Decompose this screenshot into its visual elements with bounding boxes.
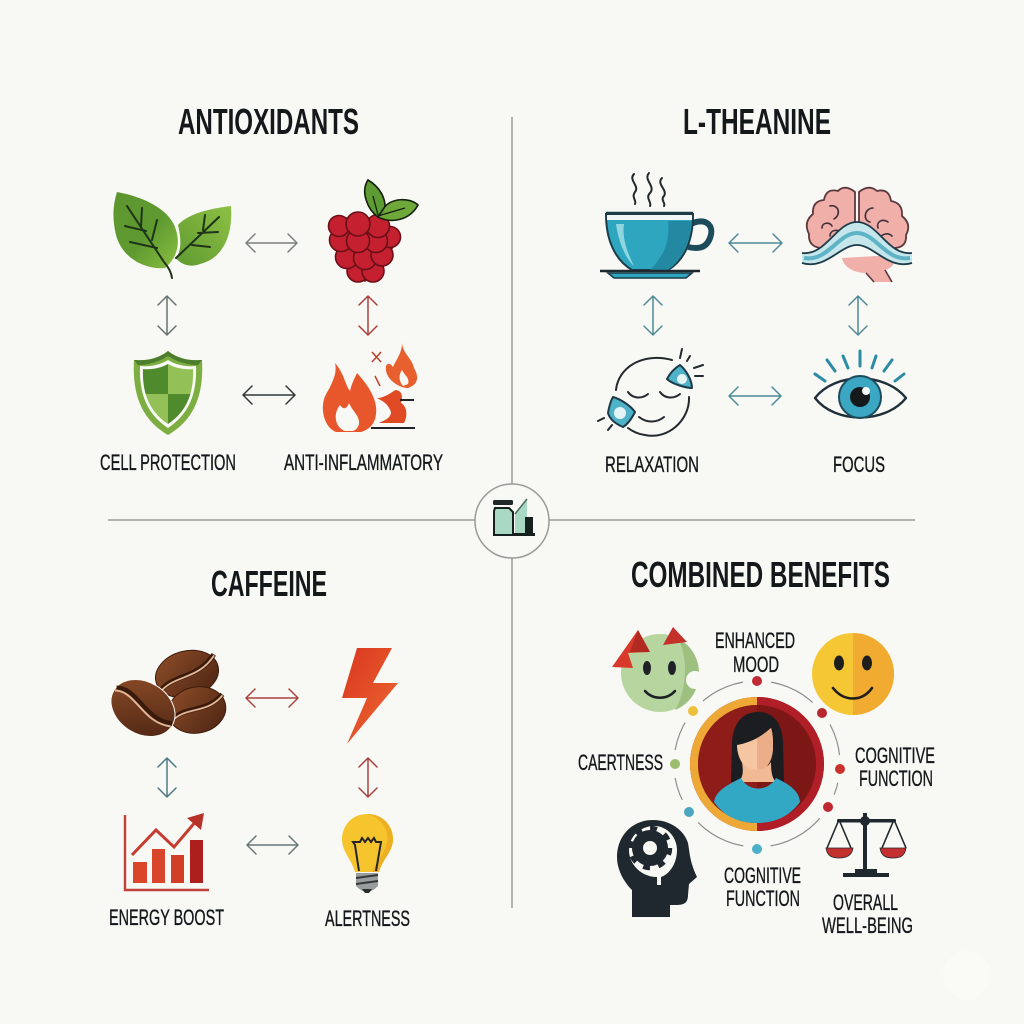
panel: combined benefits xyxy=(578,554,935,938)
arrow: leaves to shield xyxy=(158,296,176,335)
icon: flames xyxy=(323,343,417,432)
icon: raspberry xyxy=(328,180,418,282)
label: cognitive function bottom xyxy=(724,863,801,911)
panel: l-theanine xyxy=(598,101,912,477)
icon: green leaves xyxy=(113,192,231,278)
label: cognitive function right: COGNITIVE xyxy=(855,743,935,768)
arrow: bolt to bulb xyxy=(359,758,377,797)
arrow: relaxation to focus xyxy=(729,387,781,405)
watermark badge xyxy=(943,951,991,999)
arrow: shield to flames xyxy=(243,386,295,404)
center emblem: bottle and chart xyxy=(475,484,549,558)
arrow: raspberry to flames xyxy=(359,296,377,335)
icon: brain with wave xyxy=(802,188,912,282)
label: anti-inflammatory: ANTI-INFLAMMATORY xyxy=(284,450,443,475)
icon: green face with red horns xyxy=(612,627,704,712)
label: focus: FOCUS xyxy=(833,452,885,477)
icon: lightning bolt xyxy=(342,648,398,744)
label: overall well-being xyxy=(822,890,913,938)
label: alertness: ALERTNESS xyxy=(325,906,410,931)
icon: coffee beans xyxy=(100,644,230,748)
icon: relaxation face xyxy=(598,349,703,436)
dotted orbit ring xyxy=(661,667,854,863)
heading: combined benefits: COMBINED BENEFITS xyxy=(631,554,890,595)
label: cell protection: CELL PROTECTION xyxy=(100,450,236,475)
panel: antioxidants xyxy=(100,101,443,475)
icon: rising bar chart xyxy=(125,813,209,890)
label: cognitive function right xyxy=(855,743,935,791)
icon: shield xyxy=(134,351,202,435)
icon: head with gear xyxy=(617,820,697,917)
arrow: beans to bolt xyxy=(246,689,298,707)
arrow: brain to focus xyxy=(849,296,867,335)
label: enhanced mood: MOOD xyxy=(733,652,779,677)
arrow: leaves to raspberry xyxy=(246,234,297,252)
center portrait xyxy=(690,697,824,831)
icon: light bulb xyxy=(342,814,393,893)
icon: balance scales xyxy=(826,813,906,877)
label: overall well-being: WELL-BEING xyxy=(822,913,913,938)
arrow: cup to relaxation xyxy=(644,296,662,335)
icon: tea cup xyxy=(600,173,711,278)
label: relaxation: RELAXATION xyxy=(605,452,699,477)
arrow: chart to bulb xyxy=(247,836,298,854)
heading: antioxidants: ANTIOXIDANTS xyxy=(178,101,359,142)
icon: eye xyxy=(815,351,906,418)
label: cognitive function bottom: COGNITIVE xyxy=(724,863,801,888)
label: overall well-being: OVERALL xyxy=(833,890,898,915)
label: enhanced mood: ENHANCED xyxy=(715,628,795,653)
arrow: beans to chart xyxy=(158,758,176,797)
heading: caffeine: CAFFEINE xyxy=(211,563,327,604)
icon: yellow smiley xyxy=(812,633,894,715)
label: cognitive function right: FUNCTION xyxy=(859,766,933,791)
panel: caffeine xyxy=(100,563,410,931)
label: energy boost: ENERGY BOOST xyxy=(109,905,224,930)
arrow: cup to brain xyxy=(729,234,782,252)
label: enhanced mood xyxy=(715,628,795,677)
quadrant divider lines xyxy=(108,117,915,908)
label: caertness: CAERTNESS xyxy=(578,750,663,775)
label: cognitive function bottom: FUNCTION xyxy=(726,886,800,911)
heading: l-theanine: L-THEANINE xyxy=(683,101,831,142)
